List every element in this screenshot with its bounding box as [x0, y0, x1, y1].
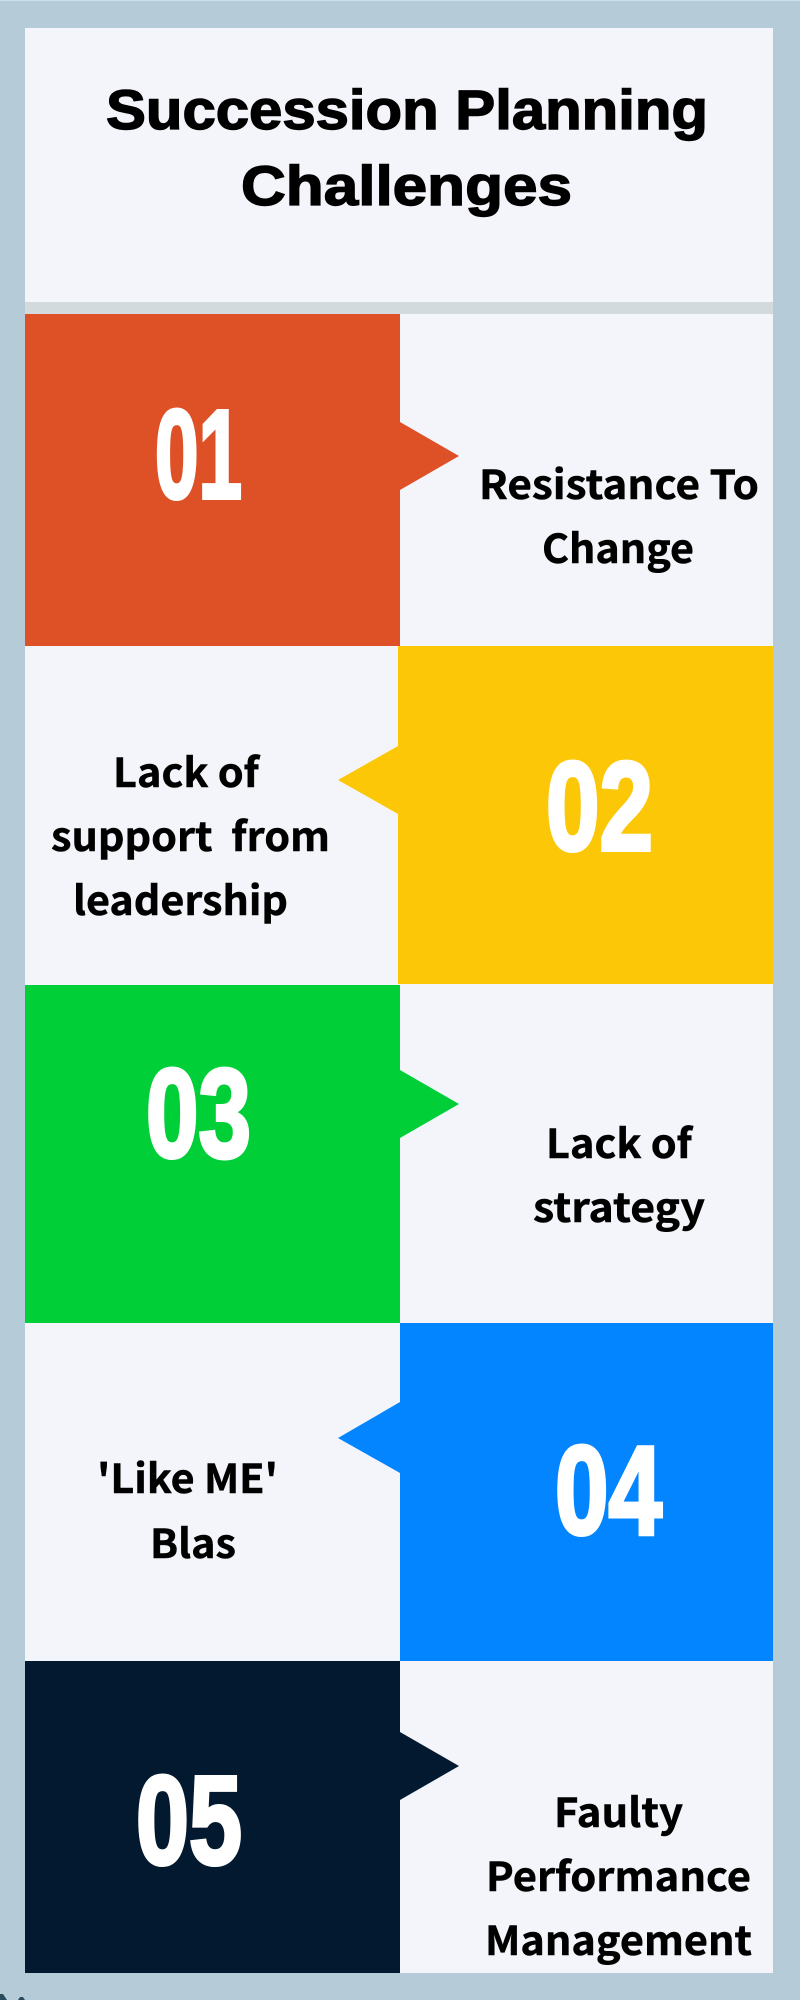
text: Lack of strategy [533, 1112, 705, 1234]
text: 'Like ME' Blas: 'Like ME' [97, 1447, 278, 1505]
number block with right pointer [25, 1661, 459, 1973]
text: Lack of strategy: Lack of [546, 1112, 694, 1170]
title [106, 78, 708, 217]
text: Resistance To Change [479, 453, 759, 575]
panel: challenge 05 [25, 1661, 752, 1973]
panel: challenge 01 [25, 314, 759, 646]
text: Faulty Performance Management: Performance [486, 1845, 751, 1903]
text: Resistance To Change: Resistance To [479, 453, 759, 511]
title: Challenges [241, 154, 572, 217]
number 01: 01 [155, 384, 242, 525]
text: Resistance To Change: Change [542, 517, 694, 575]
panel: challenge 02 [51, 646, 773, 984]
number 02: 02 [546, 736, 653, 877]
text: Faulty Performance Management: Management [485, 1909, 752, 1967]
number block with right pointer [25, 985, 459, 1323]
number 05: 05 [136, 1750, 242, 1891]
text: Faulty Performance Management [485, 1781, 752, 1967]
panel: challenge 04 [97, 1323, 773, 1661]
text: Lack of support from leadership: support from [51, 805, 330, 863]
title: Succession Planning [106, 78, 708, 141]
number block with left pointer [338, 646, 773, 984]
number 04: 04 [555, 1420, 662, 1561]
text: Lack of support from leadership [51, 741, 330, 927]
text: Lack of strategy: strategy [533, 1176, 705, 1234]
text: Lack of support from leadership: Lack of [113, 741, 261, 799]
text: 'Like ME' Blas [97, 1447, 278, 1570]
number 03: 03 [146, 1043, 251, 1184]
panel: challenge 03 [25, 985, 705, 1323]
text: Faulty Performance Management: Faulty [554, 1781, 683, 1839]
title panel [106, 78, 708, 217]
text: Lack of support from leadership: leadership [73, 869, 288, 927]
text: 'Like ME' Blas: Blas [150, 1512, 236, 1570]
number block with left pointer [338, 1323, 773, 1661]
number block with right pointer [25, 314, 459, 646]
